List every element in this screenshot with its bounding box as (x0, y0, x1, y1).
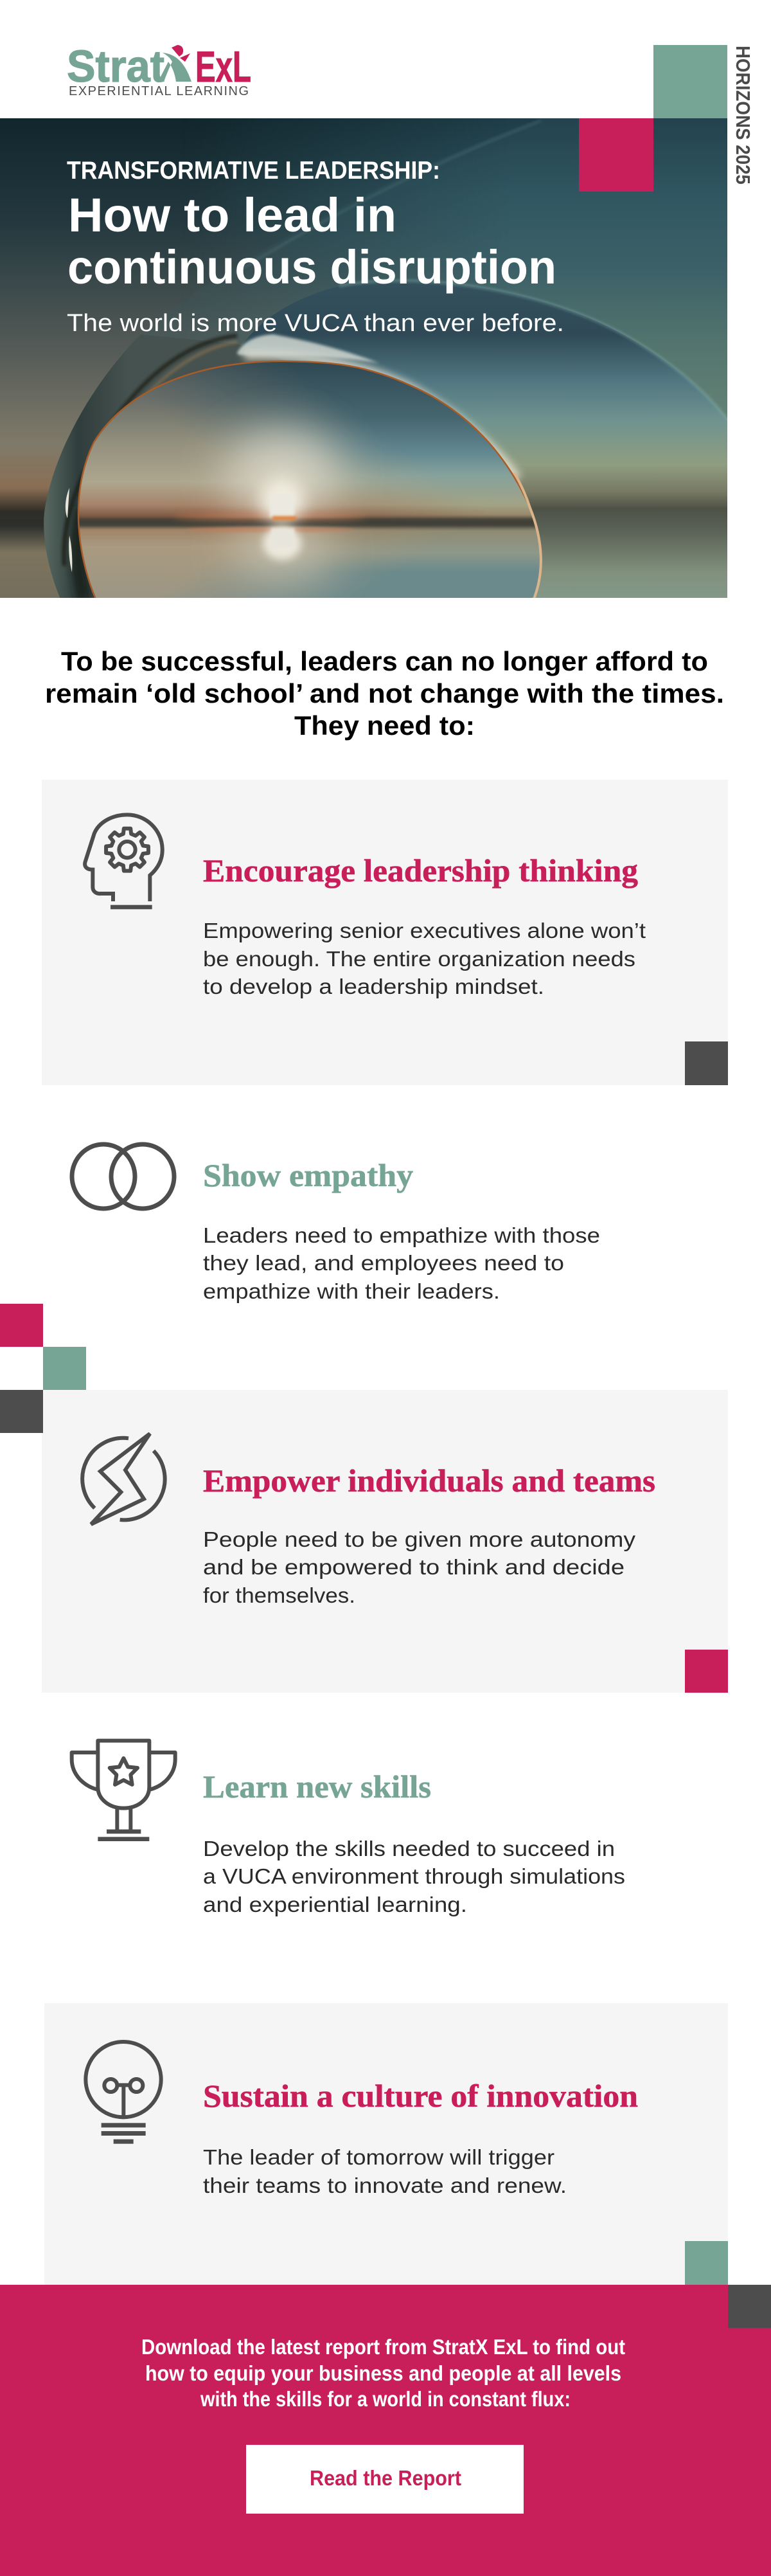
corner square (728, 2285, 771, 2328)
headline (67, 188, 556, 294)
intro statement (45, 646, 724, 741)
panel: encourage leadership thinking (42, 780, 728, 1085)
corner square (685, 1650, 728, 1693)
headline: continuous disruption (67, 240, 556, 294)
body text (203, 1527, 636, 1607)
body text: and experiential learning. (203, 1893, 467, 1916)
hero title block (67, 157, 564, 337)
logo tagline: EXPERIENTIAL LEARNING (69, 84, 249, 98)
logo (67, 41, 251, 98)
body text: a VUCA environment through simulations (203, 1864, 625, 1888)
body text (203, 1837, 625, 1916)
corner square (685, 1041, 728, 1085)
body text: People need to be given more autonomy (203, 1527, 636, 1551)
call to action text: with the skills for a world in constant flux: (200, 2387, 571, 2411)
wisp highlight (237, 334, 379, 363)
button (246, 2445, 524, 2514)
eyebrow: TRANSFORMATIVE LEADERSHIP: (67, 157, 440, 185)
logo wordmark: ExL: ExL (195, 42, 251, 91)
headline: How to lead in (68, 188, 396, 242)
body text (203, 2145, 567, 2197)
subtitle: The world is more VUCA than ever before. (67, 310, 564, 337)
body text: to develop a leadership mindset. (203, 975, 544, 998)
intro statement: remain ‘old school’ and not change with the times. (45, 678, 724, 708)
body text (203, 1223, 600, 1303)
call to action band (0, 2285, 771, 2576)
panel: show empathy (72, 1144, 600, 1303)
body text (203, 919, 646, 998)
lens interior (79, 362, 540, 598)
body text: Develop the skills needed to succeed in (203, 1837, 615, 1860)
icon: lightning bolt in circle (82, 1434, 165, 1524)
logo figure: X person (158, 45, 191, 82)
heading: Sustain a culture of innovation (203, 2078, 638, 2114)
call to action text (141, 2335, 625, 2411)
icon: light bulb (85, 2042, 161, 2144)
icon: overlapping circles (72, 1144, 174, 1209)
call to action text: how to equip your business and people at all levels (145, 2361, 621, 2385)
body text: The leader of tomorrow will trigger (203, 2145, 554, 2169)
body text: empathize with their leaders. (203, 1279, 500, 1303)
heading: Learn new skills (203, 1769, 431, 1805)
corner square (685, 2241, 728, 2285)
icon: head with gear (85, 815, 163, 909)
call to action text: Download the latest report from StratX ExL to find out (141, 2335, 625, 2359)
panel: empower individuals and teams (42, 1390, 728, 1693)
heading: Show empathy (203, 1157, 413, 1193)
body text: Leaders need to empathize with those (203, 1223, 600, 1247)
heading: Empower individuals and teams (203, 1463, 655, 1499)
body text: Empowering senior executives alone won’t (203, 919, 646, 942)
lens rim (78, 361, 541, 600)
decorative squares: hero corner (579, 45, 727, 192)
intro statement: To be successful, leaders can no longer afford to (61, 646, 708, 676)
panel: learn new skills (72, 1741, 625, 1916)
icon: trophy (72, 1741, 175, 1841)
decorative squares: left edge (0, 1304, 86, 1433)
lens left highlights (66, 488, 72, 572)
body text: and be empowered to think and decide (203, 1555, 625, 1579)
body text: for themselves. (203, 1583, 355, 1607)
heading: Encourage leadership thinking (203, 852, 638, 888)
intro statement: They need to: (294, 710, 475, 741)
button: Read the Report (310, 2466, 461, 2490)
vertical label: HORIZONS 2025 (732, 46, 754, 185)
logo wordmark: Strat: Strat (67, 41, 164, 91)
panel: sustain a culture of innovation (44, 2003, 728, 2285)
hero image: glass sphere over horizon (0, 118, 729, 604)
body text: their teams to innovate and renew. (203, 2174, 567, 2197)
body text: they lead, and employees need to (203, 1251, 564, 1275)
body text: be enough. The entire organization needs (203, 947, 635, 971)
